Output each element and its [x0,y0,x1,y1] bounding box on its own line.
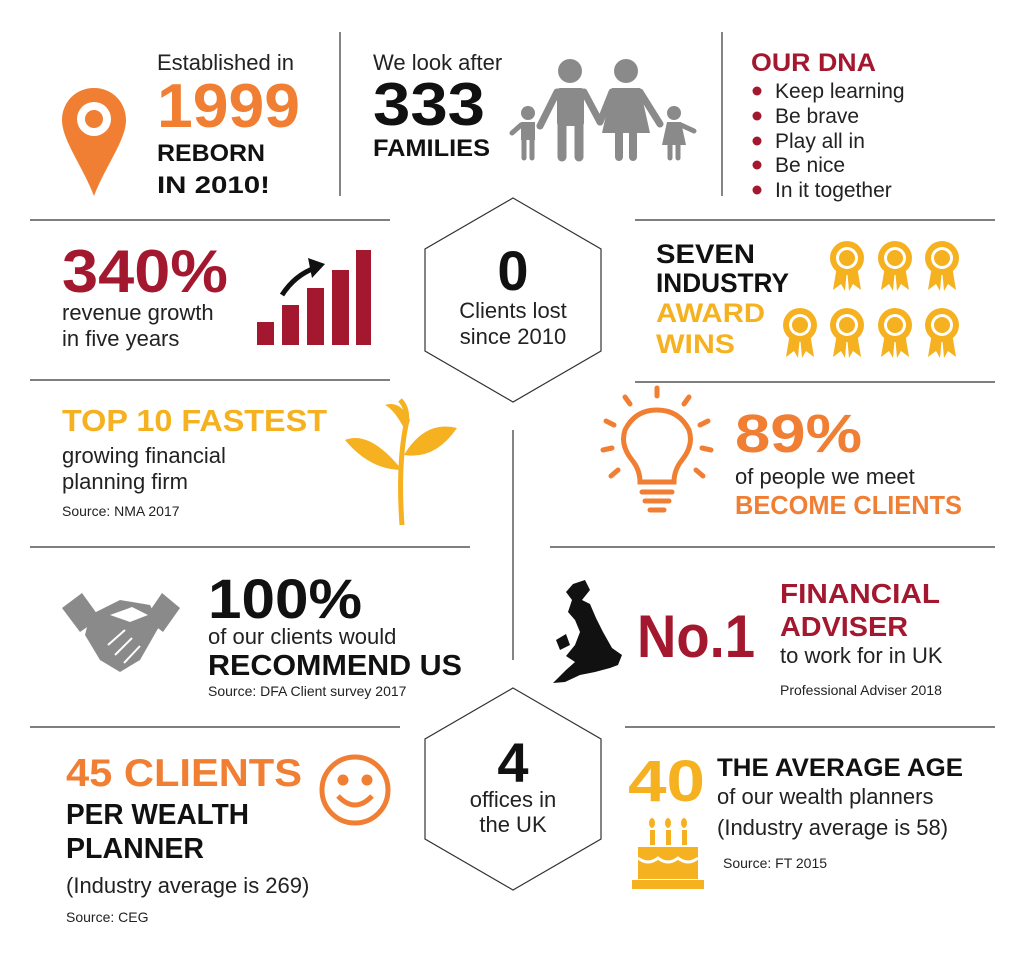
text: our dna: Keep learning [775,80,905,103]
text: 100%: of our clients would [208,624,396,649]
hexagon: clients lost: 0 [497,239,529,302]
text: 45 clients: Source: CEG [66,909,148,925]
hexagon: offices: the UK [479,812,547,837]
text: 100%: RECOMMEND US [208,650,462,682]
text: 89% [735,404,962,520]
text: awards: INDUSTRY [656,268,789,298]
icon: smiley [322,757,388,823]
icon: rosettes [783,241,959,358]
text: top 10 fastest: growing financial [62,443,226,468]
hexagon: clients lost: Clients lost [459,298,567,323]
hexagon: offices: offices in [470,787,556,812]
text: no.1: No.1 [637,603,755,670]
text: families: We look after [373,50,502,75]
text: 45 clients: PLANNER [66,833,204,865]
text: average age: of our wealth planners [717,784,933,809]
text: our dna: OUR DNA [751,49,876,77]
text: 45 clients: 45 CLIENTS [66,752,302,795]
text: revenue growth: in five years [62,326,179,351]
text: families: FAMILIES [373,135,490,162]
text: our dna: Be nice [775,154,845,177]
text: top 10 fastest: TOP 10 FASTEST [62,403,327,438]
text: 100%: Source: DFA Client survey 2017 [208,683,407,699]
text: no.1: Professional Adviser 2018 [780,682,942,698]
text: 89%: of people we meet [735,464,915,489]
icon: lightbulb [603,388,711,510]
text: revenue growth: revenue growth [62,300,214,325]
icon: uk map [553,580,622,683]
text: awards: AWARD [656,298,765,328]
text: top 10 fastest [62,403,327,519]
text: established: 1999 [157,72,300,141]
text: our dna: Be brave [775,105,859,128]
text: awards [656,239,789,359]
text: average age: (Industry average is 58) [717,815,948,840]
text: awards: WINS [656,329,735,359]
icon: cake [632,818,704,889]
text: 45 clients: PER WEALTH [66,799,249,831]
text: our dna: Play all in [775,130,865,153]
text: established: IN 2010! [157,172,270,199]
text: no.1: FINANCIAL [780,578,940,609]
text: families [373,50,502,162]
text: no.1: ADVISER [780,611,908,642]
icon: bar chart [257,250,371,345]
hexagon: offices [425,688,601,890]
text: 89%: 89% [735,404,862,464]
text: 45 clients: (Industry average is 269) [66,873,309,898]
text: established [157,50,300,199]
text: average age: Source: FT 2015 [723,855,827,871]
text: 89%: BECOME CLIENTS [735,490,962,520]
hexagon: clients lost: since 2010 [460,324,566,349]
text: families: 333 [373,71,485,138]
text: top 10 fastest: Source: NMA 2017 [62,503,180,519]
icon: plant [345,400,457,525]
text: no.1: to work for in UK [780,643,943,668]
icon: family [512,59,694,158]
text: awards: SEVEN [656,239,755,269]
hexagon: offices: 4 [497,731,529,794]
text: no.1 [637,578,943,698]
text: 45 clients [66,752,309,925]
text: average age: THE AVERAGE AGE [717,754,963,782]
text: 100%: 100% [208,567,362,630]
text: revenue growth: 340% [62,238,228,305]
hexagon: clients lost [425,198,601,402]
text: our dna [751,49,905,202]
text: 100% [208,567,462,699]
text: average age: 40 [628,749,705,814]
text: established: REBORN [157,140,265,167]
icon: location pin [62,88,126,196]
text: our dna: In it together [775,179,892,202]
text: established: Established in [157,50,294,75]
text: top 10 fastest: planning firm [62,469,188,494]
text: average age [628,749,963,871]
text: revenue growth [62,238,228,351]
icon: handshake [62,593,180,672]
